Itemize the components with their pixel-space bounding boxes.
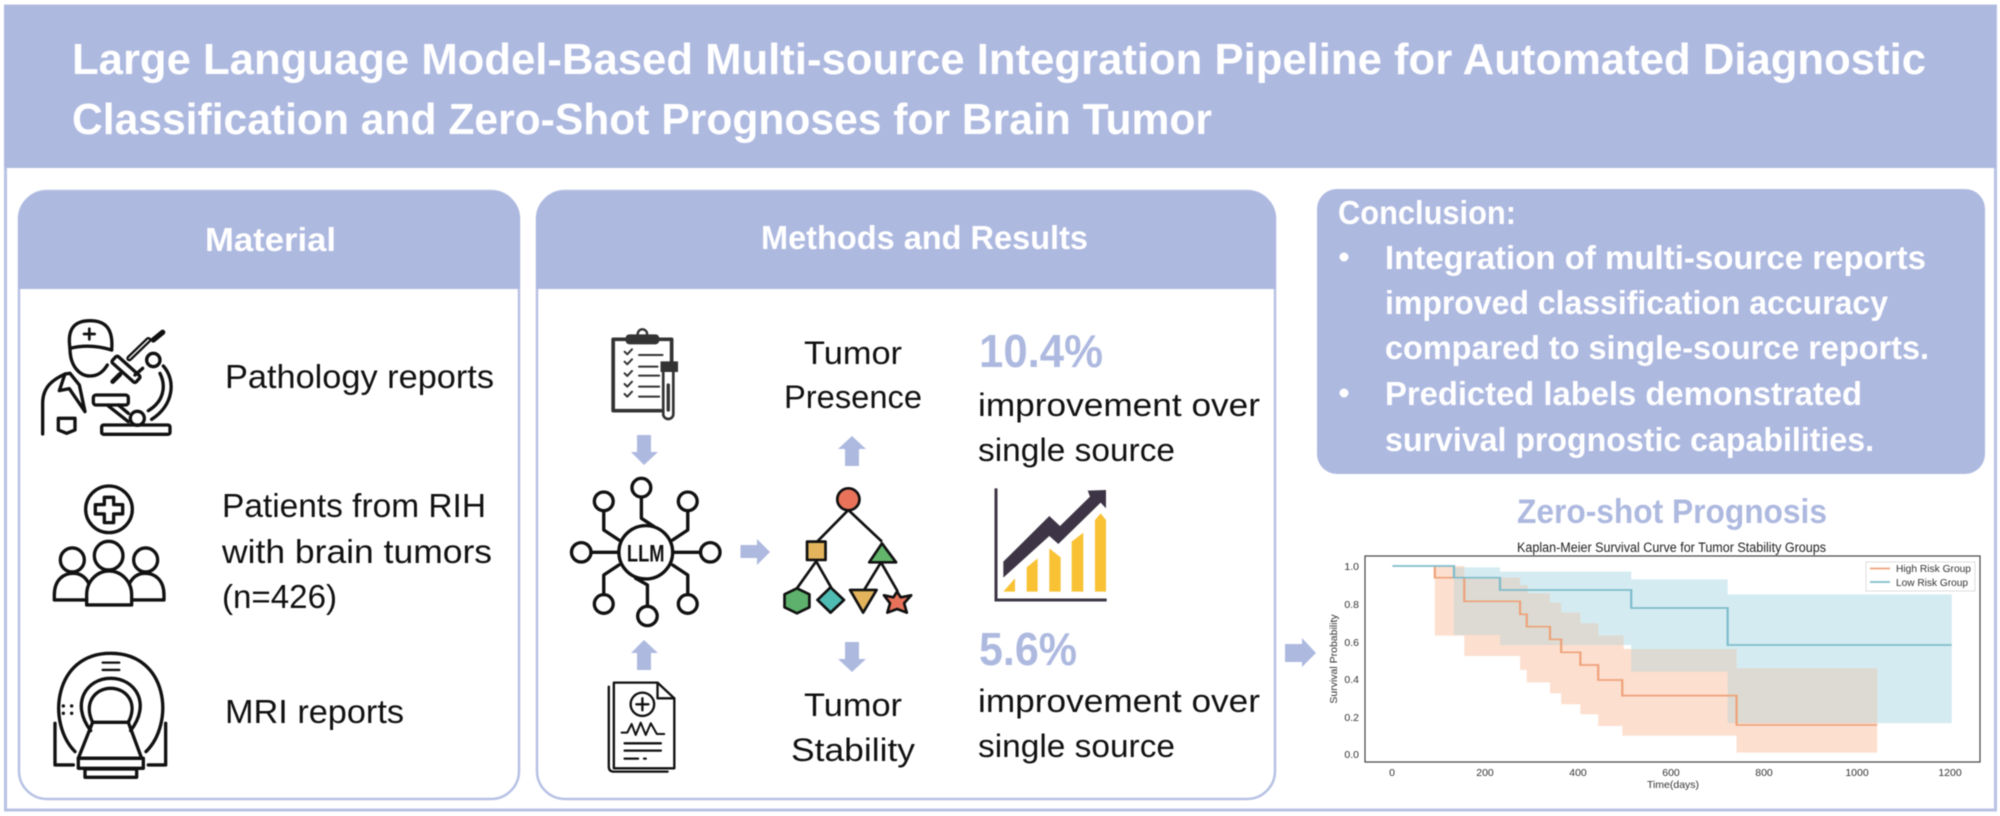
chart: Kaplan-Meier survival curve [1328, 540, 1980, 791]
text: patients description: with brain tumors [221, 533, 492, 570]
icon: decision tree [785, 488, 911, 613]
stat: tumor presence improvement: improvement over [978, 387, 1260, 423]
stat: tumor presence improvement: 10.4% [979, 325, 1103, 377]
panel: conclusion [1317, 189, 1985, 474]
text: tumor presence [784, 335, 922, 415]
stat: tumor stability improvement: single source [978, 728, 1175, 764]
conclusion bullet one: compared to single-source reports. [1385, 329, 1929, 366]
heading: material: Material [205, 221, 336, 258]
x axis ticks: 1200 [1938, 767, 1962, 779]
stat: tumor presence improvement [978, 325, 1260, 468]
text: pathology reports: Pathology reports [225, 358, 494, 395]
text: tumor presence: Tumor [804, 335, 902, 371]
legend [1866, 562, 1975, 591]
text: patients description [221, 487, 492, 615]
text: tumor stability: Stability [791, 732, 915, 768]
x axis ticks: 200 [1476, 767, 1494, 779]
title banner: Classification and Zero-Shot Prognoses for Brain Tumor [72, 95, 1212, 144]
icon: LLM network [572, 478, 720, 626]
conclusion bullet two: survival prognostic capabilities. [1385, 421, 1874, 458]
conclusion heading: Conclusion: [1338, 194, 1516, 231]
text: patients description: (n=426) [222, 578, 337, 615]
arrow: tree to tumor stability [838, 642, 866, 672]
x axis ticks: 800 [1755, 767, 1773, 779]
y axis ticks: 0.0 [1344, 749, 1359, 761]
x axis ticks: 1000 [1845, 767, 1869, 779]
stat: tumor stability improvement: improvement over [978, 683, 1260, 719]
x axis ticks: 400 [1569, 767, 1587, 779]
text: MRI reports: MRI reports [225, 693, 404, 730]
icon: medical report [609, 683, 674, 772]
x axis label: Time(days) [1647, 779, 1699, 791]
y axis ticks: 0.2 [1344, 712, 1359, 724]
text: patients description: Patients from RIH [222, 487, 486, 524]
y axis ticks: 0.4 [1344, 674, 1359, 686]
panel: material [18, 191, 520, 799]
x axis ticks: 600 [1662, 767, 1680, 779]
conclusion bullet one: Integration of multi-source reports [1385, 239, 1926, 276]
arrow: medical report to LLM [631, 640, 658, 670]
arrow: LLM to decision tree [740, 539, 770, 565]
text: tumor presence: Presence [784, 379, 922, 415]
arrow: tree to tumor presence [838, 436, 866, 466]
chart title: Kaplan-Meier Survival Curve for Tumor Stability Groups [1517, 540, 1826, 555]
conclusion bullet two: Predicted labels demonstrated [1385, 375, 1862, 412]
y axis ticks [1344, 561, 1359, 761]
icon: LLM network: LLM [627, 541, 665, 568]
icon: clipboard with test tube [613, 329, 678, 419]
text: tumor stability [791, 687, 915, 768]
stat: tumor stability improvement [978, 623, 1260, 764]
icon: rising bar chart [996, 488, 1107, 600]
x axis ticks: 0 [1389, 767, 1395, 779]
arrow: clipboard to LLM [631, 435, 658, 465]
y axis ticks: 0.6 [1344, 637, 1359, 649]
icon: doctor with microscope [43, 321, 171, 434]
x axis ticks [1389, 767, 1962, 779]
confidence bands and curves [1392, 566, 1952, 753]
panel: methods and results [536, 191, 1276, 799]
axes frame [1365, 556, 1980, 762]
legend: High Risk Group [1896, 563, 1971, 575]
stat: tumor stability improvement: 5.6% [979, 623, 1077, 675]
arrow: results to prognosis [1285, 638, 1316, 667]
stat: tumor presence improvement: single source [978, 432, 1175, 468]
heading: methods and results: Methods and Results [761, 219, 1088, 256]
title banner: Large Language Model-Based Multi-source Integration Pipeline for Automated Diagnostic [72, 35, 1926, 84]
text: tumor stability: Tumor [804, 687, 902, 723]
y axis ticks: 0.8 [1344, 599, 1359, 611]
conclusion bullet two [1340, 375, 1874, 458]
conclusion bullet one [1340, 239, 1929, 366]
conclusion bullet one: improved classification accuracy [1385, 284, 1889, 321]
legend: Low Risk Group [1896, 577, 1968, 589]
heading: zero-shot prognosis: Zero-shot Prognosis [1517, 493, 1827, 531]
icon: patients group [54, 486, 164, 605]
y axis ticks: 1.0 [1344, 561, 1359, 573]
title banner [4, 5, 1996, 168]
y axis label: Survival Probability [1328, 614, 1340, 704]
icon: MRI scanner [55, 653, 166, 777]
